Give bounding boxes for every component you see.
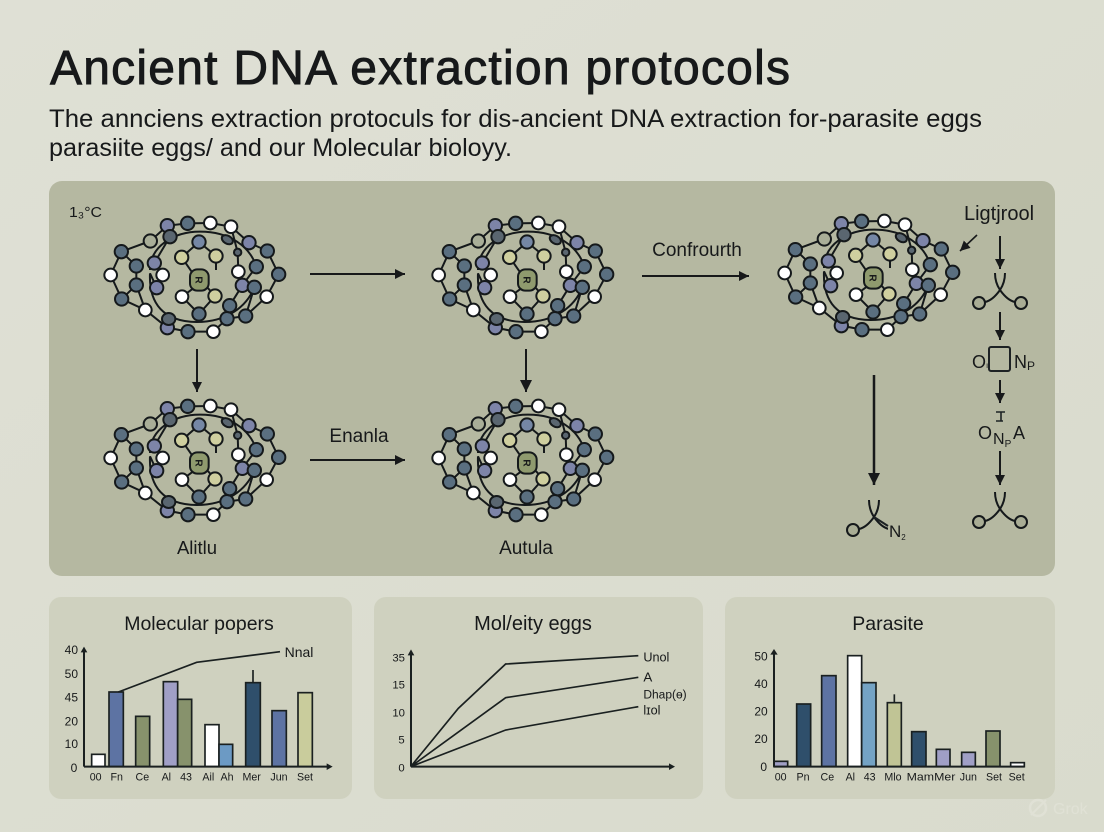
bar chart: Jun (270, 771, 288, 783)
molecule 1 (104, 217, 285, 338)
arrow 2 to 3 (642, 275, 749, 277)
line chart: A (643, 670, 652, 685)
arrow 4 to 5 (310, 459, 405, 461)
bar chart: Set (297, 771, 313, 783)
line chart: 10 (392, 707, 405, 719)
small pointer arrow (960, 235, 977, 251)
label Autula: Autula (499, 538, 553, 559)
bar chart: Al (162, 771, 171, 783)
left fork with N2: N (889, 522, 901, 541)
arrow 3 down (873, 375, 875, 485)
right column pathway: N (993, 431, 1005, 448)
line chart: 35 (392, 652, 405, 664)
right column pathway (972, 236, 1035, 528)
panel: Molecular popers bar chart (49, 597, 352, 799)
bar chart: Ce (821, 771, 834, 783)
right column pathway: O (978, 423, 992, 443)
bar chart: 50 (754, 650, 768, 664)
bar chart: Mlo (884, 771, 902, 783)
bar chart: Fn (110, 771, 123, 783)
arrow 1 down (196, 349, 198, 392)
bar chart: Set (1009, 771, 1025, 783)
bar chart: 50 (65, 667, 78, 681)
subtitle: The annciens extraction protoculs for dis-ancient DNA extraction for-parasite eggs (49, 105, 982, 133)
bar chart: 43 (864, 771, 876, 783)
right column pathway: A (1013, 423, 1025, 443)
bar chart: Al (846, 771, 855, 783)
bar chart: 00 (775, 771, 787, 783)
left fork with N2: 2 (901, 533, 906, 542)
bar chart: MamMer (907, 771, 956, 783)
label Enanla: Enanla (329, 426, 389, 447)
label Alitlu: Alitlu (177, 537, 217, 558)
right column pathway: N (1014, 352, 1027, 372)
label Confrourth: Confrourth (652, 240, 742, 261)
molecule 2 (432, 217, 613, 338)
bar chart: 40 (65, 643, 78, 657)
chart title: Parasite (852, 613, 924, 635)
line chart: Dhap(ɵ) (643, 687, 687, 701)
watermark: Grok (1053, 801, 1089, 818)
bar chart: Jun (960, 771, 977, 783)
bar chart: 0 (71, 761, 78, 775)
bar chart: 45 (65, 690, 78, 704)
bar chart: 10 (65, 737, 78, 751)
right column pathway: Oı (972, 352, 988, 372)
arrow 1 to 2 (310, 273, 405, 275)
bar chart: Ce (136, 771, 149, 783)
watermark (1030, 800, 1089, 818)
chart title: Mol/eity eggs (474, 613, 592, 635)
line chart: 0 (398, 762, 405, 774)
bar chart: 20 (754, 705, 768, 719)
subtitle (49, 105, 982, 162)
arrow 2 down (525, 349, 527, 392)
bar chart: 00 (90, 771, 102, 783)
bar chart: 43 (180, 771, 192, 783)
bar chart: 20 (65, 714, 78, 728)
panel: extraction workflow (49, 181, 1055, 576)
molecule 5 (432, 400, 613, 521)
line chart: 5 (398, 735, 405, 747)
bar chart: Mer (242, 771, 261, 783)
subtitle: parasiite eggs/ and our Molecular bioloyy. (49, 134, 512, 162)
bar chart: Pn (796, 771, 810, 783)
molecule 3 (778, 215, 959, 336)
bar chart (754, 649, 1025, 783)
line chart: Unol (643, 651, 669, 665)
bar chart: 0 (760, 760, 767, 774)
line chart (392, 649, 687, 774)
right column pathway: P (1005, 439, 1012, 450)
bar chart (65, 643, 333, 783)
bar chart: 20 (754, 732, 768, 746)
bar chart: 40 (754, 677, 768, 691)
temperature label: 1₃°C (69, 204, 102, 221)
bar chart: Ail (202, 771, 214, 783)
line chart: 15 (392, 680, 405, 692)
molecule 4 (104, 400, 285, 521)
bar chart: Set (986, 771, 1002, 783)
panel: Molleity eggs line chart (374, 597, 703, 799)
label Ligtjrool: Ligtjrool (964, 203, 1034, 225)
chart title: Molecular popers (124, 613, 274, 635)
bar chart: Nnal (285, 644, 313, 660)
title: Ancient DNA extraction protocols (50, 42, 790, 95)
right column pathway: P (1027, 359, 1035, 373)
panel: Parasite bar chart (725, 597, 1055, 799)
bar chart: Ah (220, 771, 234, 783)
left fork with N2 (847, 500, 918, 542)
line chart: lɪol (643, 704, 661, 718)
